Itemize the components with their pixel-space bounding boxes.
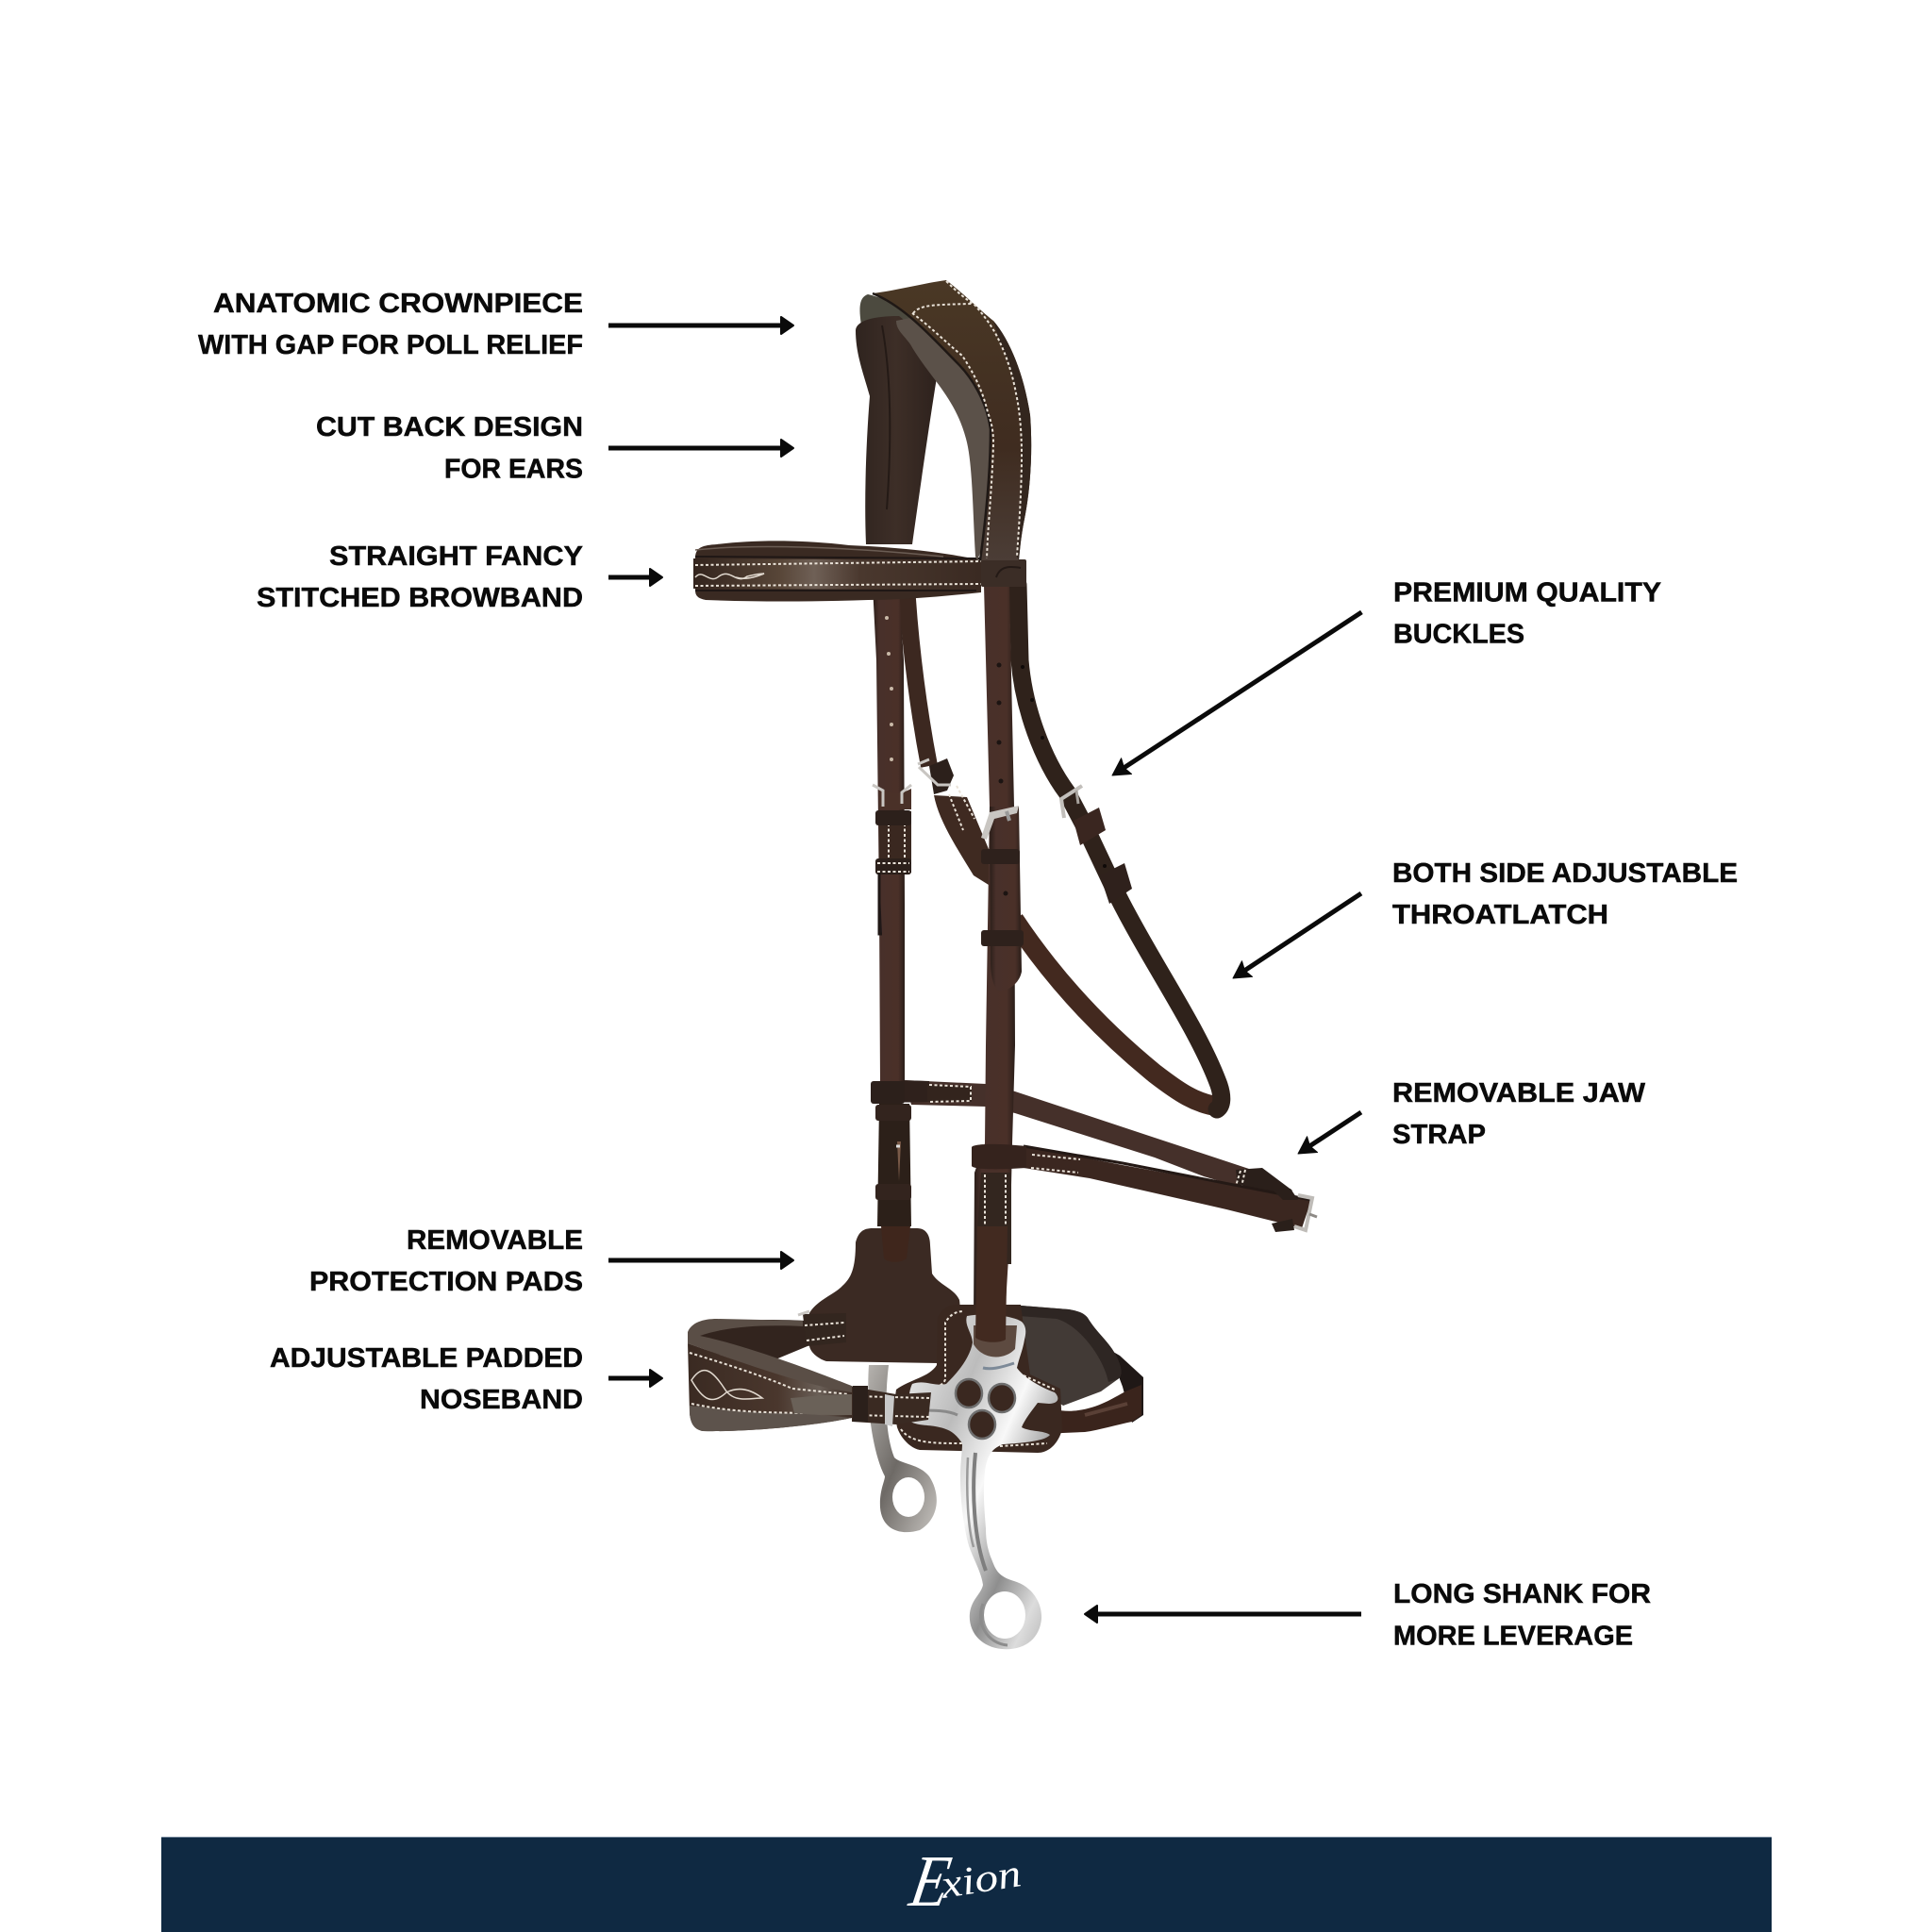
label: long shank: LONG SHANK FOR	[1393, 1579, 1651, 1609]
back strap band	[1108, 1349, 1143, 1423]
noseband front band	[688, 1343, 852, 1431]
jaw strap buckle	[1294, 1195, 1312, 1230]
noseband roll	[688, 1319, 854, 1396]
strap through plate	[975, 1226, 1008, 1342]
bridle illustration	[688, 280, 1317, 1649]
back strap	[1028, 1385, 1141, 1434]
label: jaw strap	[1392, 1078, 1646, 1150]
arrow: browband	[608, 569, 662, 586]
strap holes	[885, 616, 893, 761]
label: long shank: MORE LEVERAGE	[1393, 1621, 1633, 1651]
left shank and ring behind noseband	[868, 1365, 937, 1532]
label: anatomic crownpiece	[198, 289, 583, 360]
label: buckles	[1393, 577, 1661, 649]
label: cut back design	[316, 412, 583, 485]
browband	[693, 541, 1026, 602]
label: protection pads: PROTECTION PADS	[309, 1267, 583, 1297]
label: throatlatch: BOTH SIDE ADJUSTABLE	[1392, 858, 1738, 889]
label: long shank	[1393, 1579, 1651, 1651]
jaw strap upper	[871, 1080, 1292, 1200]
crown main leather	[873, 280, 1031, 560]
strap holes	[996, 662, 1008, 896]
gray inner pad	[1009, 1305, 1121, 1406]
throatlatch rear strap	[907, 585, 989, 885]
left cheek strap	[871, 585, 911, 1226]
label: browband: STRAIGHT FANCY	[329, 541, 583, 572]
label: buckles: PREMIUM QUALITY	[1393, 577, 1661, 608]
arrow: buckles	[1108, 605, 1367, 783]
label: jaw strap: REMOVABLE JAW	[1392, 1078, 1646, 1108]
protection pad	[806, 1226, 960, 1363]
keepers on throatlatch	[1074, 808, 1106, 845]
ring hole	[984, 1591, 1025, 1639]
crownpiece	[856, 280, 1031, 560]
arrow: noseband	[608, 1370, 662, 1387]
label: anatomic crownpiece: ANATOMIC CROWNPIECE	[213, 289, 583, 319]
crown rim	[859, 294, 924, 325]
small noseband strap and buckle	[852, 1387, 931, 1424]
noseband interior	[693, 1320, 808, 1362]
plate opening	[974, 1325, 1017, 1357]
label: protection pads	[309, 1225, 583, 1297]
label: noseband: ADJUSTABLE PADDED	[270, 1343, 583, 1374]
bit holes	[956, 1379, 1015, 1439]
arrow: crownpiece	[608, 317, 793, 334]
brand logo: E	[904, 1841, 957, 1923]
left noseband	[688, 1311, 854, 1431]
label: noseband	[270, 1343, 583, 1415]
brand logo	[904, 1841, 1024, 1923]
label: buckles: BUCKLES	[1393, 619, 1524, 649]
label: cut back design: FOR EARS	[444, 455, 583, 485]
lower right noseband	[852, 1226, 1143, 1649]
label: browband: STITCHED BROWBAND	[257, 583, 583, 613]
crown underside	[896, 316, 995, 560]
bit shadow	[974, 1453, 986, 1571]
crown inner pad	[856, 316, 937, 544]
label: browband	[257, 541, 583, 613]
label: throatlatch: THROATLATCH	[1392, 900, 1608, 930]
throatlatch long loop strap	[1014, 585, 1222, 1109]
label: protection pads: REMOVABLE	[407, 1225, 583, 1256]
arrow: jaw strap	[1293, 1105, 1366, 1161]
footer band	[161, 1837, 1772, 1932]
holes	[1021, 665, 1107, 868]
buckle	[1061, 786, 1082, 818]
arrow: protection pads	[608, 1252, 793, 1269]
label: anatomic crownpiece: WITH GAP FOR POLL RELIEF	[198, 330, 583, 360]
label: noseband: NOSEBAND	[420, 1385, 583, 1415]
silver cheek plate	[908, 1314, 1058, 1649]
label: throatlatch	[1392, 858, 1738, 930]
brand logo: xion	[937, 1852, 1024, 1907]
arrow: cut back design	[608, 440, 793, 457]
brown backing plate	[895, 1305, 1062, 1453]
label: jaw strap: STRAP	[1392, 1120, 1486, 1150]
lower jaw strap	[972, 1144, 1317, 1232]
arrow: throatlatch	[1227, 886, 1366, 986]
arrow: long shank	[1085, 1606, 1361, 1623]
front cheek strap	[974, 585, 1024, 1321]
label: cut back design: CUT BACK DESIGN	[316, 412, 583, 442]
